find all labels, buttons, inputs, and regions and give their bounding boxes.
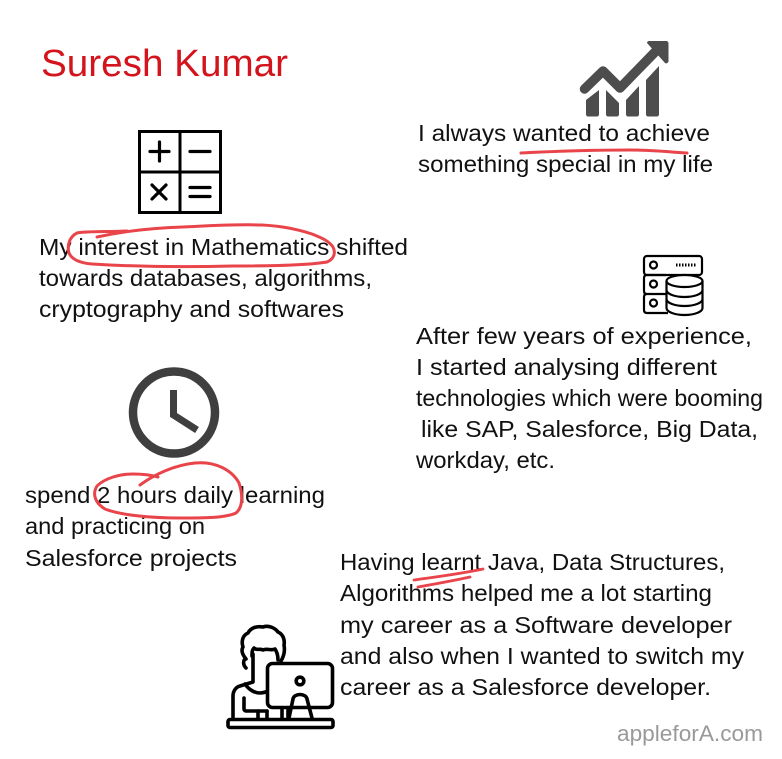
text block: technologies: technologies which were booming (416, 385, 763, 411)
panel: daily learning (25, 372, 325, 571)
icon: person at computer (228, 626, 333, 728)
text block: technologies: I started analysing different (416, 354, 718, 380)
text block: java and career: Algorithms helped me a lot starting (340, 580, 712, 606)
text block: java and career: and also when I wanted to switch my (340, 643, 745, 669)
callout: circle around interest in mathematics (68, 225, 334, 267)
callout: double underline learnt (414, 569, 483, 587)
text block: interest in mathematics: My interest in Mathematics shifted (39, 234, 408, 260)
text block: technologies: like SAP, Salesforce, Big Data, (421, 416, 758, 442)
callout: circle around 2 hours daily (95, 463, 242, 518)
text block: spend 2 hours daily: and practicing on (25, 513, 205, 539)
text block: technologies: workday, etc. (415, 447, 555, 473)
panel: analysing technologies (415, 256, 763, 473)
icon: math symbols grid (139, 131, 221, 213)
icon: server and database (644, 256, 702, 315)
text block: java and career: Having learnt Java, Data Structures, (340, 549, 725, 575)
title: Suresh Kumar (41, 43, 288, 85)
text block: interest in mathematics: cryptography and softwares (39, 296, 344, 322)
text block: achieve (418, 120, 713, 177)
panel: mathematics (39, 131, 408, 322)
text block: spend 2 hours daily (25, 482, 325, 571)
panel: achieve something special (418, 41, 713, 177)
text block: technologies: After few years of experience, (416, 323, 752, 349)
text block: achieve: I always wanted to achieve (418, 120, 710, 146)
text block: technologies (415, 323, 763, 473)
watermark: appleforA.com (617, 721, 763, 746)
text block: java and career (340, 549, 745, 700)
panel: learnt java (228, 549, 745, 728)
callout: underline wanted to achieve (521, 150, 687, 153)
icon: growth chart with arrow (584, 41, 668, 116)
text block: interest in mathematics (39, 234, 408, 322)
text block: interest in mathematics: towards databases, algorithms, (39, 265, 372, 291)
icon: clock (133, 372, 215, 454)
text block: spend 2 hours daily: spend 2 hours daily learning (25, 482, 325, 508)
text block: achieve: something special in my life (418, 151, 713, 177)
text block: spend 2 hours daily: Salesforce projects (25, 545, 237, 571)
text block: java and career: my career as a Software developer (340, 612, 732, 638)
text block: java and career: career as a Salesforce developer. (340, 674, 711, 700)
